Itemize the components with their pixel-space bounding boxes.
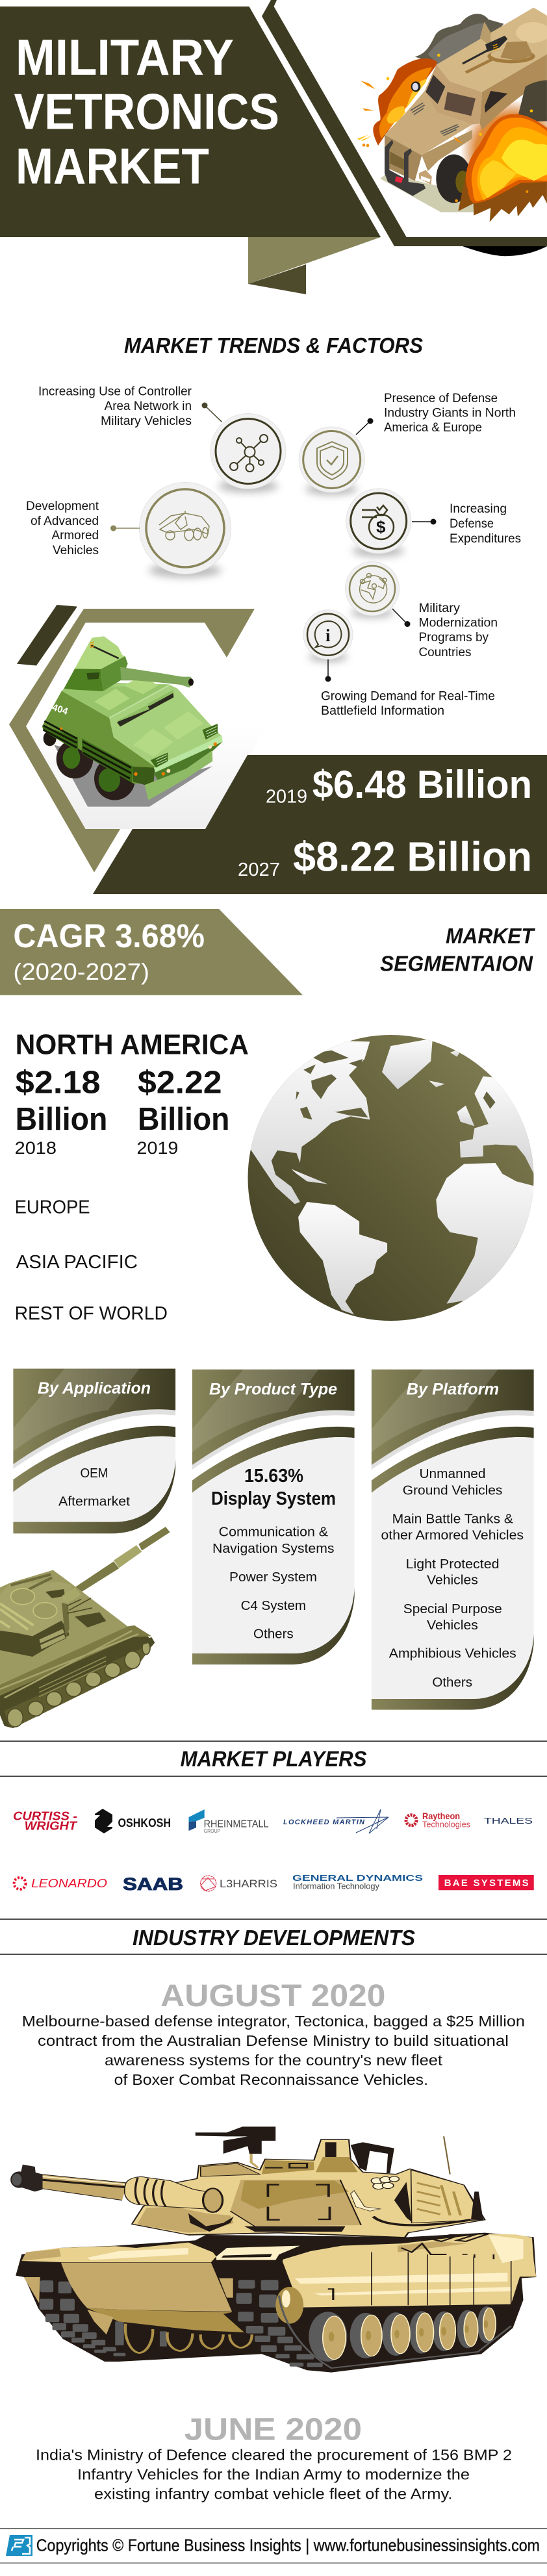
CAGR panel: [0, 909, 303, 995]
card: by platform: Main Battle Tanks &: [392, 1512, 514, 1527]
regional data: [15, 1029, 249, 1324]
value 2019: $2.22: [138, 1065, 222, 1101]
logo: Rheinmetall: [188, 1809, 269, 1834]
development: June 2020: Infantry Vehicles for the Indian Army to modernize the: [77, 2466, 470, 2483]
logo: Curtiss-Wright: WRIGHT: [25, 1820, 78, 1833]
card: by platform: Unmanned: [420, 1467, 486, 1481]
logo: Raytheon Technologies: Raytheon: [422, 1811, 460, 1821]
development: August 2020: [22, 1979, 525, 2088]
card: by platform: Light Protected: [406, 1557, 499, 1572]
olive tank illustration: [0, 1527, 170, 1728]
title panel: [0, 6, 381, 237]
trend: defense industry giants: Presence of Defense: [384, 392, 498, 405]
logo: Saab: SAAB: [123, 1874, 183, 1894]
value 2019: 2019: [136, 1138, 178, 1158]
heading: market segmentation: SEGMENTAION: [380, 952, 533, 976]
development: August 2020: contract from the Australian Defense Ministry to build situational: [38, 2032, 509, 2049]
section heading: market players: MARKET PLAYERS: [181, 1746, 366, 1770]
card: by application: By Application: [38, 1379, 151, 1397]
card: by product type: 15.63%: [244, 1466, 303, 1486]
logo: BAE Systems: BAE SYSTEMS: [444, 1878, 529, 1889]
card: by platform: [372, 1370, 534, 1710]
tan battle tank illustration: [10, 2126, 536, 2373]
trend: defense industry giants: Industry Giants in North: [384, 407, 516, 420]
trend: controller area network: Military Vehicles: [101, 414, 192, 428]
logo: Oshkosh: OSHKOSH: [118, 1817, 171, 1830]
icon: Fortune Business Insights logo: [6, 2535, 32, 2556]
trend: real-time battlefield information: [303, 610, 495, 718]
logo: General Dynamics: Information Technology: [293, 1881, 379, 1891]
development: August 2020: of Boxer Combat Reconnaissance Vehicles.: [114, 2071, 428, 2088]
trend: defense expenditures: Increasing: [450, 502, 507, 516]
heading: market segmentation: [380, 925, 535, 976]
regional data: REST OF WORLD: [15, 1303, 168, 1324]
market size 2019: 2019: [266, 787, 307, 808]
card: by product type: Communication &: [219, 1525, 329, 1540]
value 2019: Billion: [138, 1102, 229, 1137]
card: by platform: Ground Vehicles: [403, 1483, 502, 1498]
section heading: market trends and factors: MARKET TRENDS & FACTORS: [124, 333, 423, 357]
footer: [0, 2529, 547, 2563]
market size 2019: $6.48 Billion: [312, 763, 532, 806]
development: June 2020: [36, 2413, 512, 2503]
logo: Lockheed Martin: LOCKHEED MARTIN: [283, 1818, 365, 1826]
market size 2027: $8.22 Billion: [293, 834, 532, 880]
card: by platform: By Platform: [407, 1381, 499, 1399]
CAGR panel: CAGR 3.68%: [13, 917, 205, 954]
logo: Curtiss-Wright: CURTISS -: [13, 1810, 77, 1823]
trend: real-time battlefield information: Growing Demand for Real-Time: [321, 690, 495, 703]
trend: controller area network: Area Network in: [105, 400, 192, 413]
card: by application: Aftermarket: [58, 1495, 130, 1509]
segmentation cards: [13, 1369, 534, 1710]
logo: Curtiss-Wright: [13, 1810, 78, 1833]
card: by application: [13, 1369, 175, 1533]
hexagon panel with green armored vehicle: [9, 605, 266, 873]
card: by application: OEM: [81, 1466, 108, 1481]
trend: advanced armored vehicles: [26, 482, 231, 578]
trend: defense industry giants: America & Europe: [384, 421, 482, 435]
value 2018: Billion: [16, 1102, 107, 1137]
logo: L3Harris: [201, 1876, 277, 1891]
trend: advanced armored vehicles: Vehicles: [53, 544, 99, 557]
development: August 2020: AUGUST 2020: [160, 1979, 385, 2013]
card: by platform: Special Purpose: [403, 1602, 502, 1616]
card: by platform: Others: [432, 1676, 472, 1690]
trend: real-time battlefield information: i: [325, 626, 331, 645]
hexagon frame: [262, 0, 547, 256]
card: by platform: other Armored Vehicles: [381, 1528, 524, 1542]
card: by product type: C4 System: [241, 1599, 306, 1613]
trend: advanced armored vehicles: Armored: [52, 529, 99, 542]
logo: Lockheed Martin: [283, 1809, 388, 1833]
trend: defense expenditures: $: [376, 517, 386, 537]
value 2019: [136, 1065, 229, 1158]
heading: market segmentation: MARKET: [446, 925, 535, 949]
value 2018: 2018: [15, 1138, 57, 1158]
development: June 2020: existing infantry combat vehicle fleet of the Army.: [94, 2486, 452, 2503]
trend: advanced armored vehicles: Development: [26, 500, 99, 513]
logo: Raytheon Technologies: [406, 1811, 470, 1830]
value 2018: [15, 1065, 107, 1158]
icon: green armored vehicle: 404: [51, 702, 70, 717]
trend: military modernization: Modernization: [418, 616, 498, 630]
market trends circles: [26, 385, 521, 718]
title: [14, 29, 279, 195]
trend: advanced armored vehicles: of Advanced: [31, 515, 99, 528]
logo: Rheinmetall: RHEINMETALL: [204, 1819, 269, 1830]
development: August 2020: Melbourne-based defense integrator, Tectonica, bagged a $25 Million: [22, 2013, 525, 2030]
trend: military modernization: Military: [418, 602, 461, 615]
icon: green armored vehicle: [42, 636, 223, 807]
section heading: industry developments: INDUSTRY DEVELOPMENTS: [133, 1926, 415, 1950]
development: August 2020: awareness systems for the country's new fleet: [105, 2052, 443, 2069]
regional data: NORTH AMERICA: [16, 1029, 249, 1061]
trend: controller area network: [38, 385, 286, 492]
card: by platform: Vehicles: [427, 1618, 478, 1633]
card: by product type: By Product Type: [209, 1381, 337, 1399]
card: by product type: Others: [253, 1627, 294, 1642]
trend: military modernization: Programs by: [418, 631, 489, 644]
title: MILITARY: [16, 29, 234, 86]
trend: defense industry giants: [299, 392, 516, 495]
development: June 2020: JUNE 2020: [184, 2413, 362, 2447]
trend: defense expenditures: [346, 489, 521, 557]
logo: Rheinmetall: GROUP: [204, 1828, 220, 1834]
market size banner: [93, 755, 547, 894]
regional data: EUROPE: [15, 1197, 90, 1218]
card: by product type: [192, 1370, 355, 1664]
logo: Raytheon Technologies: Technologies: [422, 1820, 470, 1830]
logo: General Dynamics: GENERAL DYNAMICS: [292, 1874, 423, 1883]
card: by platform: Vehicles: [427, 1574, 478, 1588]
regional data: ASIA PACIFIC: [16, 1252, 138, 1273]
development: June 2020: India's Ministry of Defence cleared the procurement of 156 BMP 2: [36, 2447, 512, 2464]
company logos: [13, 1809, 534, 1894]
card: by product type: Power System: [229, 1570, 317, 1585]
logo: BAE Systems: [439, 1875, 534, 1890]
value 2018: $2.18: [16, 1065, 101, 1101]
card: by product type: Navigation Systems: [212, 1542, 334, 1556]
title: MARKET: [16, 138, 209, 195]
trend: real-time battlefield information: Battlefield Information: [321, 704, 444, 718]
trend: defense expenditures: Defense: [450, 517, 494, 531]
trend: defense expenditures: Expenditures: [450, 532, 521, 546]
title: VETRONICS: [14, 83, 279, 140]
market size 2027: 2027: [238, 860, 280, 880]
trend: military modernization: Countries: [418, 646, 472, 659]
armored truck and explosion illustration: [357, 8, 547, 222]
logo: Oshkosh: [95, 1809, 171, 1833]
globe: [241, 1035, 537, 1321]
logo: L3Harris: L3HARRIS: [220, 1878, 277, 1890]
logo: Leonardo: LEONARDO: [31, 1877, 107, 1890]
card: by platform: Amphibious Vehicles: [389, 1647, 516, 1661]
trend: controller area network: Increasing Use of Controller: [38, 385, 192, 399]
logo: General Dynamics: [292, 1874, 423, 1891]
logo: Thales: THALES: [484, 1816, 533, 1826]
ribbon fold: [248, 237, 381, 294]
trend: military modernization: [346, 561, 498, 659]
card: by product type: Display System: [211, 1488, 336, 1509]
CAGR panel: (2020-2027): [13, 958, 149, 985]
header banner: [0, 0, 547, 294]
